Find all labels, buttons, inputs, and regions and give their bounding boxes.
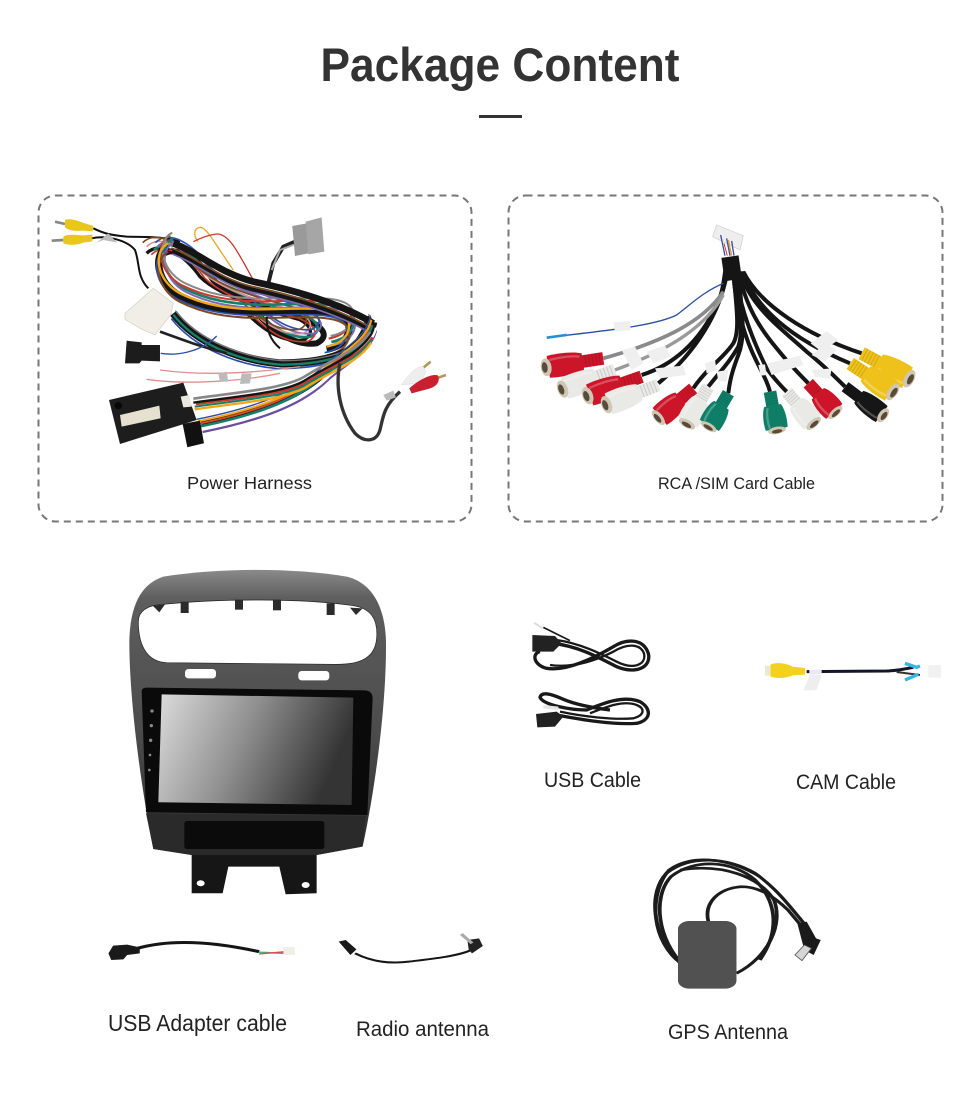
GPS antenna bbox=[655, 860, 821, 989]
display screen bbox=[158, 694, 353, 805]
lower USB cable bbox=[536, 694, 648, 727]
label: radio antenna: Radio antenna bbox=[356, 1018, 489, 1041]
black connector with blue wire bbox=[125, 336, 217, 363]
radio antenna cable bbox=[339, 934, 483, 963]
label: USB adapter cable: USB Adapter cable bbox=[108, 1010, 287, 1036]
lower dark section bbox=[146, 813, 366, 855]
slots bbox=[185, 669, 329, 680]
title: Package Content bbox=[320, 38, 680, 91]
orange and red loop wires bbox=[193, 227, 253, 280]
cable wires bbox=[642, 257, 862, 393]
rear RCA leads bbox=[52, 219, 180, 288]
panel: RCA / SIM card cable bbox=[508, 196, 942, 522]
storage pocket bbox=[184, 821, 324, 849]
title underline bbox=[479, 115, 522, 118]
head unit with dash panel bbox=[129, 570, 386, 894]
audio output lead bbox=[338, 362, 446, 440]
RCA sockets bbox=[539, 343, 919, 436]
grey harness connector bbox=[268, 217, 324, 283]
panel: power harness bbox=[38, 196, 472, 522]
upper USB cable bbox=[532, 623, 649, 670]
mounting clips bbox=[153, 600, 363, 615]
white harness connector bbox=[125, 288, 173, 335]
screen bezel bbox=[142, 688, 373, 815]
USB adapter cable bbox=[108, 942, 295, 960]
label: RCA / SIM card cable: RCA /SIM Card Cable bbox=[658, 475, 815, 493]
control box bbox=[109, 383, 204, 447]
GPS plug bbox=[795, 922, 821, 961]
dash frame bbox=[129, 570, 386, 855]
grey and blue leads bbox=[547, 283, 723, 370]
cable label tags bbox=[613, 321, 838, 382]
CAM cable bbox=[765, 663, 941, 691]
pink wires bbox=[147, 367, 300, 384]
GPS receiver puck bbox=[678, 921, 736, 989]
power harness wiring illustration bbox=[52, 217, 446, 447]
label: power harness: Power Harness bbox=[187, 473, 312, 493]
bottom mounting bracket bbox=[192, 852, 317, 894]
bezel icons bbox=[148, 709, 154, 771]
multi-pin plug bbox=[713, 225, 743, 256]
GPS coiled cable bbox=[655, 860, 807, 973]
upper cut-out bbox=[138, 600, 377, 664]
label: GPS antenna: GPS Antenna bbox=[668, 1021, 788, 1044]
wire bundle bbox=[143, 233, 376, 432]
label: CAM cable: CAM Cable bbox=[796, 771, 896, 794]
USB cables bbox=[532, 623, 649, 727]
RCA cable illustration bbox=[539, 225, 919, 436]
label: USB cable: USB Cable bbox=[544, 769, 641, 792]
